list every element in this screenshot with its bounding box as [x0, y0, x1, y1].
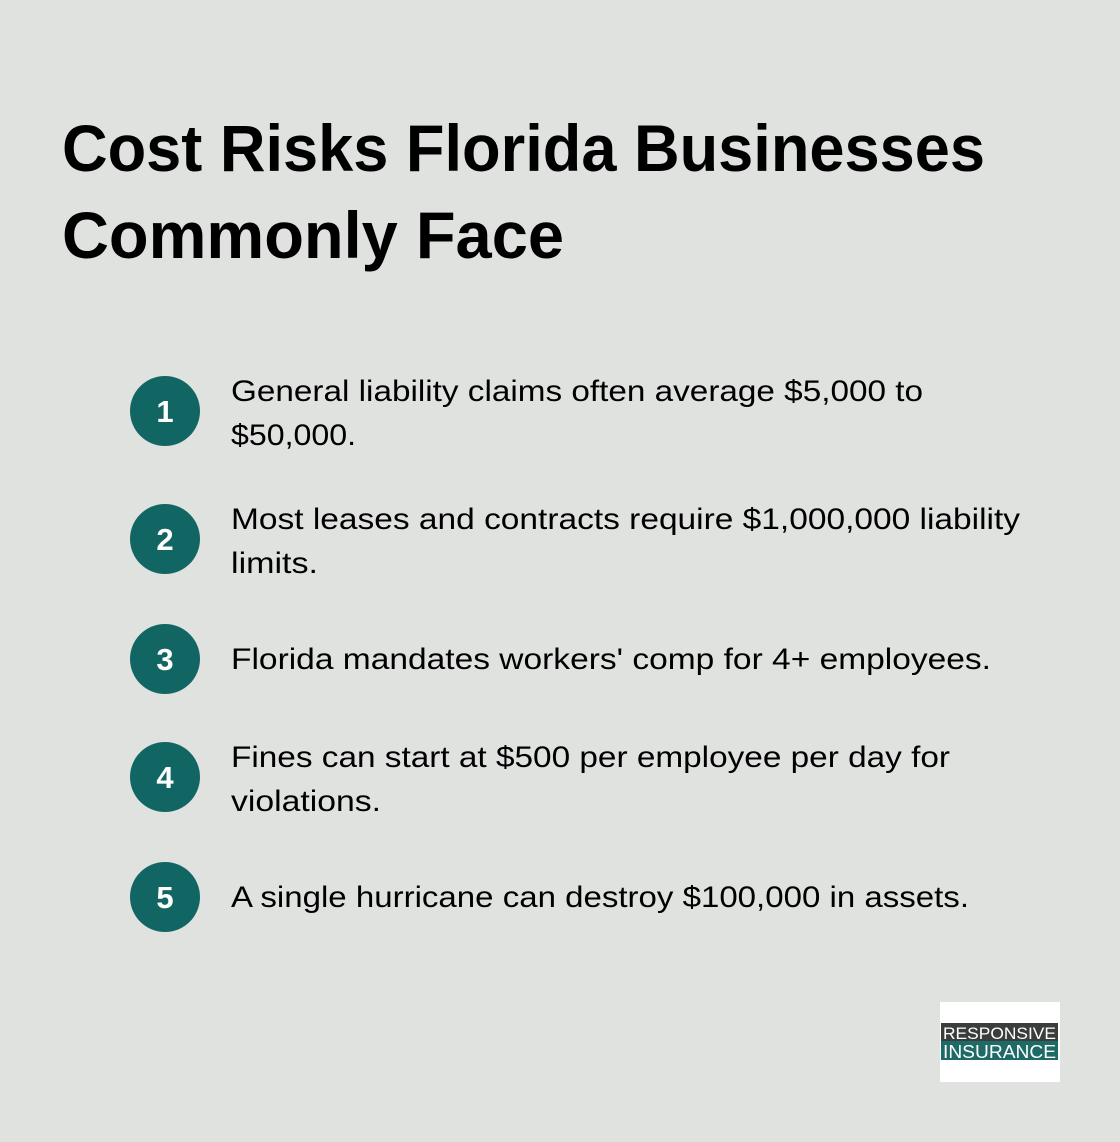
- list item 2: 2: [156, 522, 174, 557]
- list item 3: Florida mandates workers' comp for 4+ employees.: [231, 643, 991, 676]
- list item 1: [130, 375, 923, 452]
- list item 4: 4: [156, 760, 174, 795]
- logo: [940, 1002, 1060, 1082]
- list item 1: 1: [156, 394, 174, 429]
- logo: INSURANCE: [943, 1042, 1056, 1062]
- list item 4: violations.: [231, 785, 381, 818]
- list item 3: [130, 624, 991, 694]
- list item 5: [130, 862, 969, 932]
- list item 3: 3: [156, 642, 174, 677]
- logo: RESPONSIVE: [943, 1024, 1056, 1043]
- list item 5: 5: [156, 880, 174, 915]
- list item 4: [130, 741, 950, 818]
- list item 2: limits.: [231, 547, 318, 580]
- list item 4: Fines can start at $500 per employee per day for: [231, 741, 950, 774]
- list item 1: $50,000.: [231, 419, 356, 452]
- title: [62, 111, 985, 272]
- list item 2: [130, 503, 1020, 580]
- list item 2: Most leases and contracts require $1,000,000 liability: [231, 503, 1020, 536]
- list item 1: General liability claims often average $5,000 to: [231, 375, 923, 408]
- title: Cost Risks Florida Businesses: [62, 111, 985, 185]
- list item 5: A single hurricane can destroy $100,000 in assets.: [231, 881, 969, 914]
- title: Commonly Face: [62, 198, 564, 272]
